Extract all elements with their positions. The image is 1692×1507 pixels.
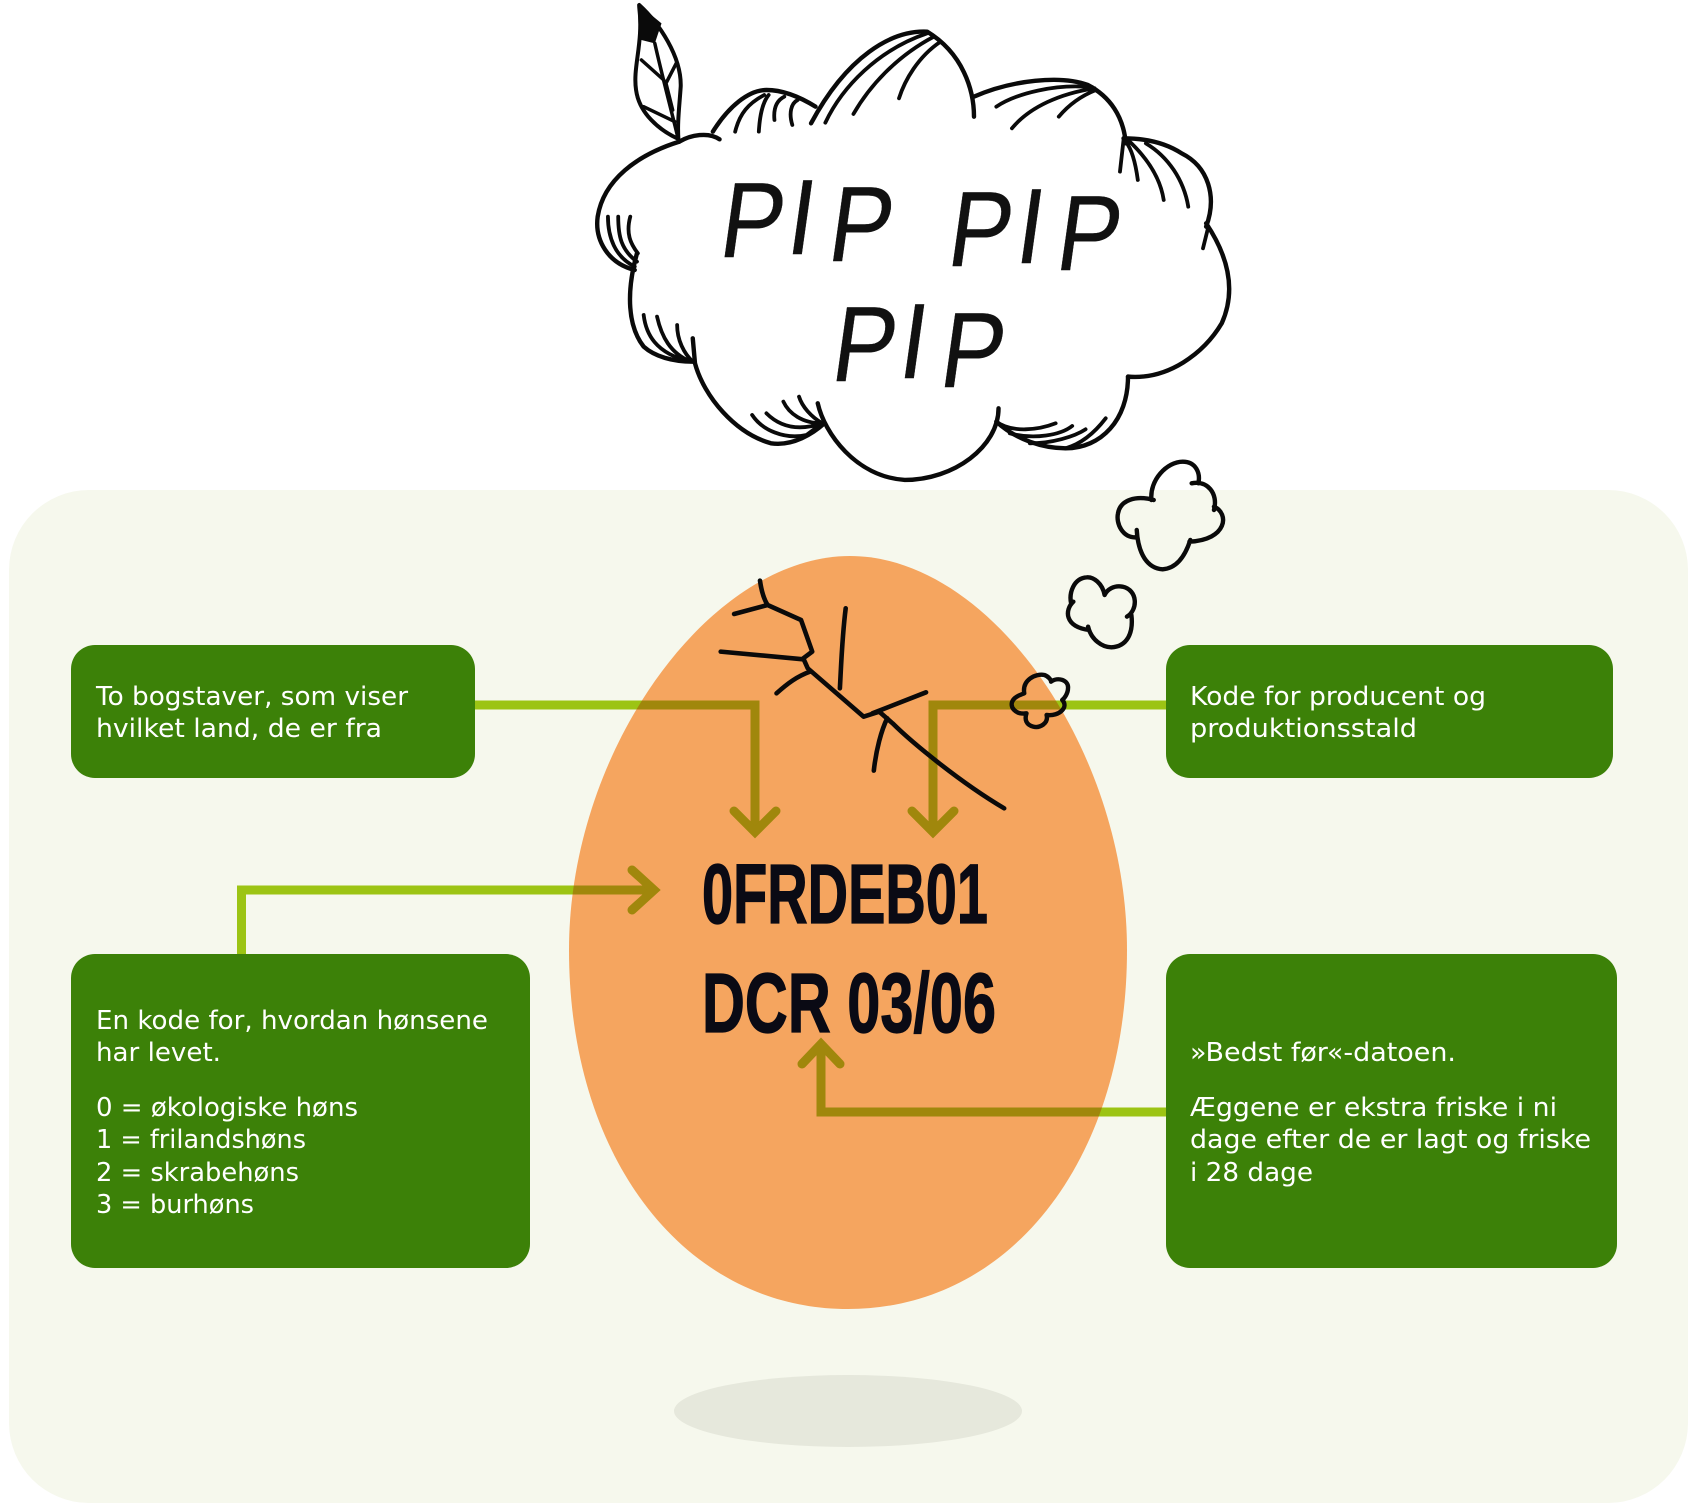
panel: best before date: i 28 dage — [1190, 1158, 1313, 1188]
icon: feather — [635, 5, 681, 140]
large thought cloud — [597, 32, 1229, 480]
panel: producer code: Kode for producent og — [1190, 682, 1486, 712]
panel: how the hens lived — [71, 954, 530, 1268]
panel: best before date: »Bedst før«-datoen. — [1190, 1038, 1456, 1068]
panel: country letters: To bogstaver, som viser — [95, 682, 408, 712]
panel: best before date — [1166, 954, 1617, 1268]
panel: producer code — [1166, 645, 1613, 778]
panel: how the hens lived: 0 = økologiske høns — [96, 1093, 358, 1123]
crack in the egg shell — [721, 581, 1004, 808]
egg — [569, 556, 1127, 1309]
panel: best before date: dage efter de er lagt og friske — [1190, 1125, 1591, 1155]
egg code text: DCR 03/06 — [702, 956, 996, 1050]
egg code text — [702, 847, 996, 1050]
panel: best before date: Æggene er ekstra friske i ni — [1190, 1093, 1557, 1123]
arrow: producer code — [912, 705, 1167, 832]
panel: country letters — [71, 645, 475, 778]
thought bubble: small cloud 3 — [1118, 462, 1223, 569]
heading: PIP PIP PIP: PIP — [941, 167, 1131, 293]
panel: how the hens lived: 3 = burhøns — [96, 1190, 254, 1220]
egg code text: 0FRDEB01 — [702, 847, 988, 941]
panel: how the hens lived: En kode for, hvordan hønsene — [96, 1006, 488, 1036]
panel: how the hens lived: 2 = skrabehøns — [96, 1158, 299, 1188]
panel: country letters: hvilket land, de er fra — [96, 714, 382, 744]
panel: producer code: produktionsstald — [1190, 714, 1417, 744]
thought bubble: small cloud 1 — [1012, 675, 1068, 727]
heading: PIP PIP PIP: PIP — [825, 282, 1015, 410]
panel: how the hens lived: 1 = frilandshøns — [96, 1125, 306, 1155]
arrow: country letters — [474, 705, 776, 832]
heading: PIP PIP PIP: PIP — [713, 158, 903, 284]
panel: how the hens lived: har levet. — [96, 1038, 221, 1068]
thought bubble: small cloud 2 — [1068, 577, 1135, 647]
heading: PIP PIP PIP — [713, 158, 1131, 410]
arrow: best before — [802, 1044, 1167, 1112]
arrow: hen code — [242, 870, 654, 955]
panel: background — [9, 490, 1688, 1503]
egg shadow — [674, 1375, 1022, 1447]
